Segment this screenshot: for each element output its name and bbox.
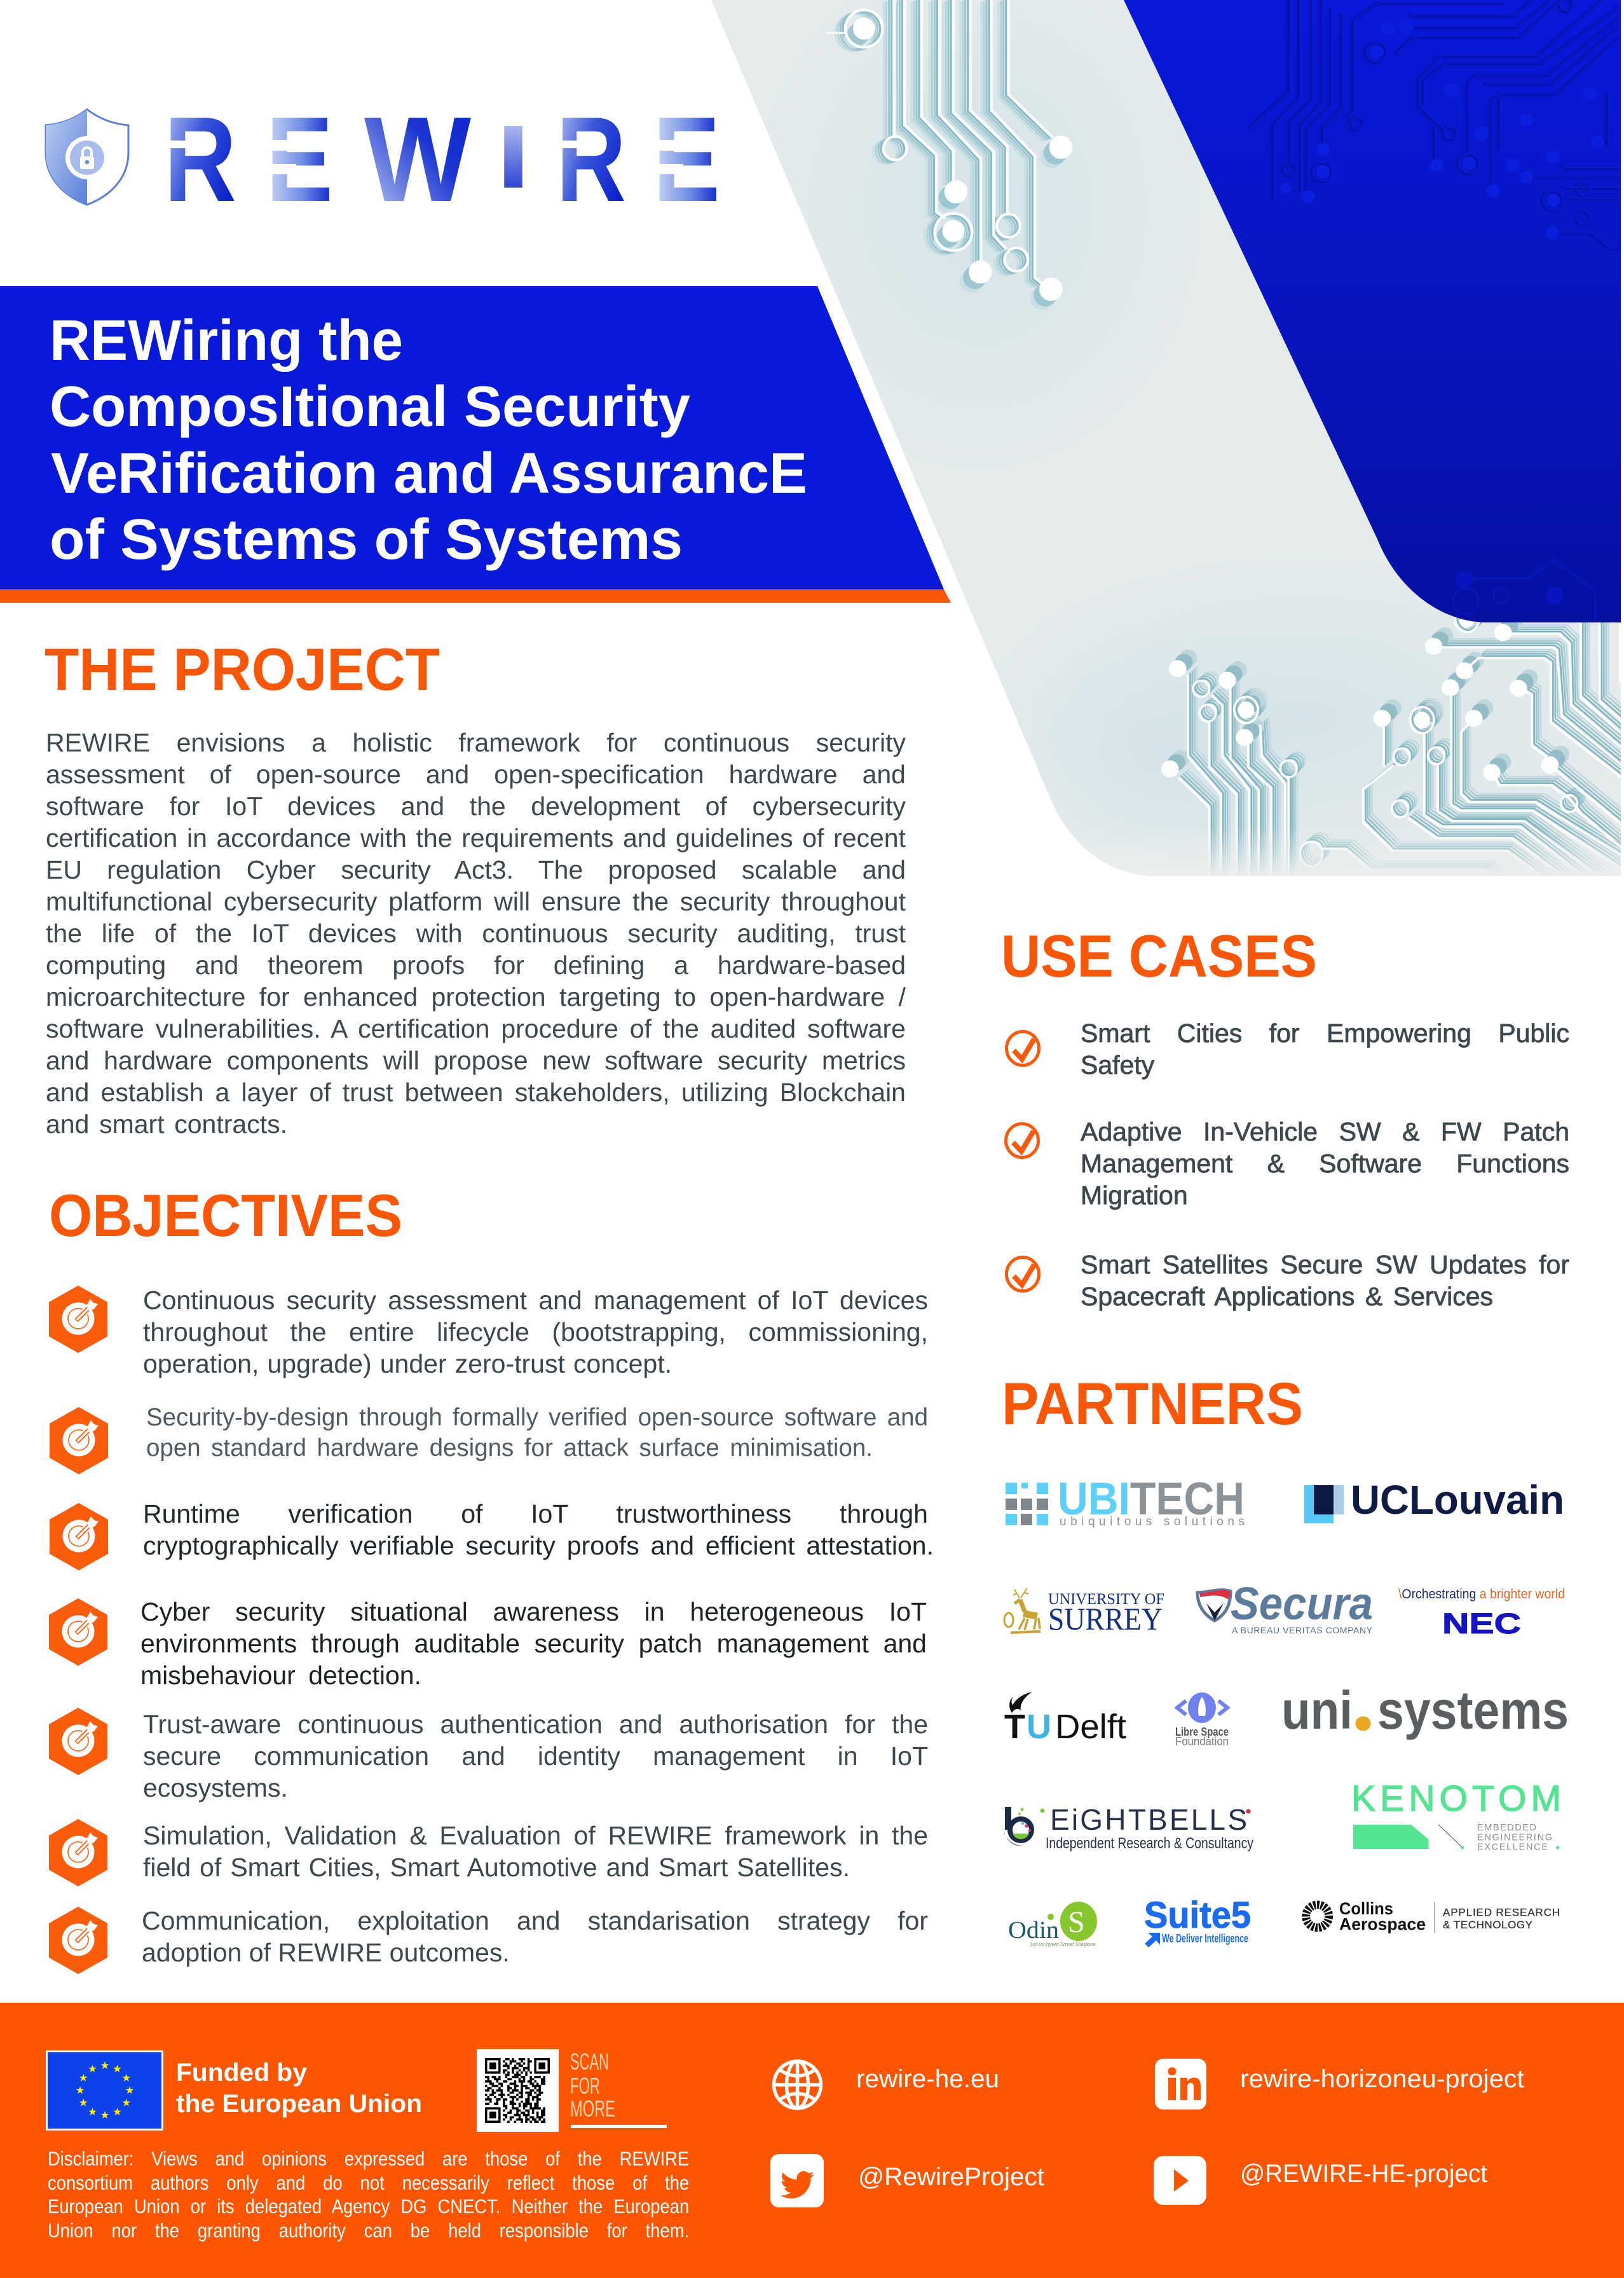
objective 5: ecosystems.: [143, 1773, 288, 1802]
disclaimer: Union nor the granting authority can be held responsible for them.: [48, 2219, 689, 2242]
QR code: [477, 2049, 559, 2132]
project description: [46, 727, 906, 1140]
objective 5: secure communication and identity management in IoT: [143, 1741, 928, 1771]
objective 3: cryptographically verifiable security proofs and efficient attestation.: [143, 1531, 934, 1560]
objective 6: [44, 1819, 938, 1889]
funded by text: [176, 2059, 422, 2118]
project description: REWIRE envisions a holistic framework for continuous security: [46, 728, 906, 757]
logo: Eight Bells: [1004, 1803, 1253, 1852]
use case 1: [1004, 1017, 1573, 1081]
objective 2: open standard hardware designs for attack surface minimisation.: [146, 1434, 873, 1462]
logo: Collins Aerospace: [1306, 1899, 1560, 1934]
use case 1: Smart Cities for Empowering Public: [1081, 1019, 1569, 1048]
scan for more: FOR: [570, 2073, 600, 2099]
logo: NEC: NEC: [1442, 1607, 1521, 1640]
logo: Collins Aerospace: & TECHNOLOGY: [1443, 1919, 1532, 1931]
wordmark letters: E: [653, 92, 720, 227]
project description: software for IoT devices and the development of cybersecurity: [46, 792, 906, 821]
logo: Suite5: We Deliver Intelligence: [1162, 1932, 1248, 1945]
wordmark letters: W: [364, 92, 472, 227]
heading: use cases: USE CASES: [1001, 923, 1317, 989]
linkedin handle: rewire-horizoneu-project: [1240, 2065, 1524, 2093]
objective 5: [44, 1708, 938, 1809]
title: ComposItional Security: [50, 375, 690, 439]
twitter handle: @RewireProject: [858, 2163, 1044, 2191]
objective 2: [44, 1403, 938, 1479]
objective 3: [44, 1498, 938, 1574]
logo: Kenotom: ENGINEERING: [1477, 1832, 1552, 1842]
objective 7: adoption of REWIRE outcomes.: [142, 1938, 510, 1967]
wordmark letters: R: [556, 92, 626, 227]
scan for more: [570, 2048, 667, 2128]
funded by text: Funded by: [176, 2059, 308, 2087]
use case 3: [1004, 1249, 1573, 1312]
panel: dark blue corner with circuit: [1124, 0, 1621, 622]
heading: partners: PARTNERS: [1002, 1370, 1303, 1437]
objective 6: field of Smart Cities, Smart Automotive and Smart Satellites.: [143, 1853, 850, 1882]
project description: the life of the IoT devices with continuous security auditing, trust: [46, 919, 906, 948]
logo: Eight Bells: EiGHTBELLS: [1050, 1803, 1247, 1836]
project description: and establish a layer of trust between stakeholders, utilizing Blockchain: [46, 1078, 906, 1107]
use case 2: Migration: [1081, 1181, 1188, 1210]
logo: OdinS: [1008, 1902, 1097, 1947]
objective 3: Runtime verification of IoT trustworthiness through: [143, 1499, 928, 1528]
project description: and hardware components will propose new software security metrics: [46, 1046, 906, 1075]
objective 4: misbehaviour detection.: [140, 1661, 421, 1690]
wordmark letters: R: [164, 92, 236, 227]
logo: TU Delft: U: [1027, 1708, 1051, 1746]
disclaimer: Disclaimer: Views and opinions expressed are those of the REWIRE: [48, 2147, 689, 2170]
use case 2: Adaptive In-Vehicle SW & FW Patch: [1081, 1117, 1569, 1146]
logo: Secura: Secura: [1231, 1579, 1373, 1630]
icon: twitter: [770, 2154, 824, 2207]
logo: Libre Space Foundation: Foundation: [1175, 1735, 1229, 1748]
title: of Systems of Systems: [50, 508, 683, 572]
objective 1: throughout the entire lifecycle (bootstrapping, commissioning,: [143, 1317, 928, 1347]
use case 1: Safety: [1081, 1050, 1154, 1080]
heading: objectives: OBJECTIVES: [49, 1182, 402, 1249]
logo: OdinS: S: [1068, 1905, 1085, 1939]
objective 1: Continuous security assessment and management of IoT devices: [143, 1286, 928, 1315]
title: VeRification and AssurancE: [51, 442, 807, 505]
logo: Libre Space Foundation: [1175, 1692, 1229, 1748]
logo: NEC: \Orchestrating a brighter world: [1398, 1587, 1565, 1602]
panel: the project: [38, 636, 915, 1144]
icon: bottom circuit traces: [1161, 599, 1624, 879]
icon: top circuit traces: [826, 0, 1072, 310]
logo: University of Surrey: SURREY: [1048, 1601, 1163, 1636]
project description: software vulnerabilities. A certification procedure of the audited software: [46, 1014, 906, 1043]
logo: Secura: [1198, 1579, 1373, 1635]
objective 6: Simulation, Validation & Evaluation of REWIRE framework in the: [143, 1821, 928, 1850]
logo: UCLouvain: UCLouvain: [1351, 1477, 1564, 1523]
project description: certification in accordance with the requirements and guidelines of recent: [46, 823, 906, 853]
logo: UBITECH: ubiquitous solutions: [1060, 1515, 1245, 1528]
logo: OdinS: Let us invent Smart Solutions: [1030, 1941, 1096, 1947]
logo: Kenotom: EXCELLENCE: [1477, 1842, 1548, 1853]
wordmark letters: [164, 92, 720, 227]
project description: assessment of open-source and open-specification hardware and: [46, 760, 906, 789]
project description: microarchitecture for enhanced protection targeting to open-hardware /: [46, 982, 906, 1012]
project description: computing and theorem proofs for defining a hardware-based: [46, 950, 906, 980]
disclaimer: consortium authors only and do not necessarily reflect those of the: [48, 2171, 689, 2193]
panel: partners: [998, 1373, 1576, 1958]
website: rewire-he.eu: [856, 2065, 999, 2093]
icon: youtube: [1154, 2156, 1206, 2205]
logo: Libre Space Foundation: Libre Space: [1175, 1726, 1229, 1738]
logo: REWIRE: [44, 92, 720, 227]
logo: Kenotom: EMBEDDED: [1477, 1823, 1536, 1833]
use case 3: Smart Satellites Secure SW Updates for: [1081, 1250, 1569, 1279]
logo: Suite5: Suite5: [1144, 1895, 1251, 1936]
logo: uni.systems: systems: [1377, 1680, 1569, 1740]
logo: University of Surrey: UNIVERSITY OF: [1048, 1591, 1164, 1608]
logo: Secura: A BUREAU VERITAS COMPANY: [1232, 1625, 1373, 1635]
scan for more: SCAN: [570, 2048, 609, 2075]
objective 7: [44, 1905, 938, 1976]
project description: and smart contracts.: [46, 1109, 287, 1139]
use case 2: Management & Software Functions: [1081, 1149, 1569, 1178]
icon: shield with padlock: [46, 109, 128, 205]
wordmark letters: E: [266, 92, 333, 227]
objective 4: environments through auditable security patch management and: [140, 1629, 927, 1658]
panel: title banner: [0, 286, 953, 604]
scan for more: MORE: [570, 2096, 615, 2122]
logo: uni.systems: [1281, 1680, 1569, 1740]
objective 1: [44, 1284, 938, 1386]
logo: TU Delft: T: [1004, 1708, 1025, 1746]
use case 2: [1004, 1115, 1573, 1211]
logo: Kenotom: KENOTOM: [1351, 1778, 1561, 1819]
disclaimer: European Union or its delegated Agency DG CNECT. Neither the European: [48, 2195, 689, 2218]
logo: UBITECH: [1006, 1474, 1245, 1528]
project description: EU regulation Cyber security Act3. The proposed scalable and: [46, 855, 906, 884]
logo: TU Delft: [1004, 1692, 1126, 1746]
banner background: [0, 286, 951, 603]
logo: University of Surrey: [1004, 1588, 1164, 1636]
logo: Collins Aerospace: Aerospace: [1339, 1915, 1426, 1934]
panel: objectives: [38, 1189, 941, 1984]
background: circuit decoration: [711, 0, 1621, 876]
title: REWiring the: [50, 309, 403, 373]
logo: TU Delft: Delft: [1055, 1708, 1126, 1746]
objective 7: Communication, exploitation and standarisation strategy for: [142, 1906, 928, 1935]
objective 4: [44, 1596, 938, 1698]
objective 5: Trust-aware continuous authentication and authorisation for the: [143, 1710, 928, 1739]
panel: pale grey diagonal band with circuits: [711, 0, 1624, 884]
objective 1: operation, upgrade) under zero-trust concept.: [143, 1349, 672, 1378]
logo: Collins Aerospace: APPLIED RESEARCH: [1443, 1906, 1560, 1919]
funded by text: the European Union: [176, 2090, 422, 2118]
logo: Collins Aerospace: Collins: [1339, 1899, 1393, 1918]
logo: UBITECH: UBITECH: [1058, 1474, 1245, 1525]
heading: the project: THE PROJECT: [44, 636, 440, 703]
logo: Kenotom: [1351, 1778, 1561, 1853]
logo: OdinS: Odin: [1008, 1917, 1059, 1944]
project description: multifunctional cybersecurity platform will ensure the security throughout: [46, 887, 906, 916]
title: [50, 309, 807, 572]
panel: use cases: [998, 928, 1576, 1316]
youtube handle: @REWIRE-HE-project: [1240, 2160, 1487, 2188]
icon: EU flag: [46, 2050, 163, 2130]
panel: footer: [0, 2003, 1624, 2278]
icon: globe: [774, 2061, 821, 2108]
disclaimer: [48, 2147, 689, 2242]
logo: NEC: [1398, 1587, 1565, 1640]
logo: uni.systems: uni: [1281, 1680, 1353, 1740]
use case 3: Spacecraft Applications & Services: [1081, 1282, 1493, 1311]
objective 4: Cyber security situational awareness in heterogeneous IoT: [140, 1597, 927, 1626]
wordmark letters: I: [496, 106, 531, 207]
objective 2: Security-by-design through formally verified open-source software and: [146, 1404, 928, 1431]
icon: linkedin: [1155, 2059, 1206, 2110]
logo: Eight Bells: Independent Research & Consultancy: [1046, 1835, 1253, 1852]
